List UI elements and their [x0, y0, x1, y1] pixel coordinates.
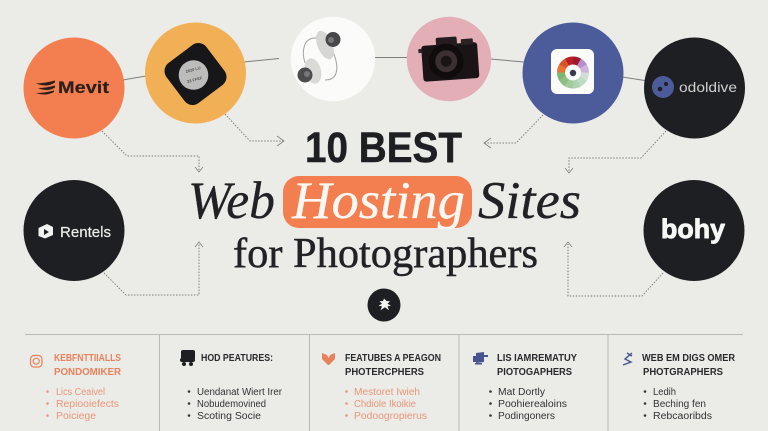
dotted arrow: device to title: [225, 114, 284, 146]
panel: column 3: [322, 352, 441, 422]
panel: column 5: [623, 352, 735, 422]
bullet list: Scoting Socie: [197, 411, 261, 422]
connector lines between top circles: [123, 58, 645, 80]
circle: Rentels logo: [24, 180, 124, 281]
icon: blue monitor: [473, 352, 488, 364]
bullet list: Lics Ceaivel: [56, 387, 105, 398]
circle: colour wheel app on blue: [522, 22, 624, 124]
heading: LIS IAMREMATUY: [497, 352, 577, 364]
circle: black device on amber: 23 FFEF: [186, 75, 203, 84]
bullet list: Poohierealoins: [498, 399, 567, 410]
title: [188, 124, 581, 277]
panel: column 4: [473, 352, 577, 422]
heading: [497, 352, 577, 378]
circle: camera on pink: [407, 17, 491, 101]
dotted arrow: Mevit to title: [102, 131, 203, 172]
icon: blue squiggle: [623, 353, 632, 365]
dotted arrow: palette to title: [484, 115, 543, 148]
dotted arrow: bohy to title: [564, 242, 663, 296]
title word: Web: Web: [188, 172, 275, 230]
circle: Mevit logo: [24, 38, 124, 138]
bullet list: Mestoret Iwieh: [354, 387, 420, 398]
icon: black device: [180, 350, 195, 366]
panel: column 1: [30, 352, 121, 422]
heading: [642, 352, 735, 378]
bullet list: Rebcaoribds: [653, 411, 712, 422]
bullet list: Beching fen: [653, 399, 706, 410]
bullet list: Poiciege: [56, 411, 96, 422]
icon: camera outline: [30, 356, 42, 367]
dotted arrow: Rentels to title: [104, 242, 203, 295]
bullet list: Podingoners: [498, 411, 555, 422]
title word: Sites: Sites: [478, 172, 581, 230]
circle: bohy logo: [644, 180, 744, 281]
heading: HOD PEATURES:: [201, 352, 273, 364]
bullet list: Chdiole Ikoikie: [354, 399, 416, 410]
bullet list: Repiooiefects: [56, 399, 119, 410]
bullet list: [489, 387, 567, 422]
heading: [54, 352, 121, 378]
footer dividers: [25, 334, 743, 431]
badge icon: [368, 288, 400, 322]
heading: PIOTOGAPHERS: [497, 366, 572, 378]
heading: KEBFNTTIIALLS: [54, 352, 121, 364]
dotted arrow: odoldive to title: [565, 131, 666, 173]
bullet list: [644, 387, 712, 422]
bullet list: Podoogropierus: [354, 411, 427, 422]
bullet list: [345, 387, 427, 422]
bullet list: Nobudemovined: [197, 399, 266, 410]
title line: 10 BEST: 10 BEST: [305, 124, 462, 172]
heading: PONDOMIKER: [54, 366, 121, 378]
circle: odoldive logo: [644, 38, 745, 138]
heading: FEATUBES A PEAGON: [345, 352, 441, 364]
circle: Rentels logo: Rentels: [60, 224, 111, 241]
circle: white earbuds: [291, 17, 375, 101]
heading: WEB EM DIGS OMER: [642, 352, 735, 364]
circle: odoldive logo: odoldive: [679, 79, 737, 95]
panel: column 2: [180, 350, 283, 422]
heading: PHOTGRAPHERS: [643, 366, 723, 378]
bullet list: Ledih: [653, 387, 676, 398]
icon: orange heart: [322, 353, 335, 365]
highlight pill: Hosting: Hosting: [291, 172, 465, 230]
bullet list: Uendanat Wiert Irer: [197, 387, 283, 398]
circle: black device on amber: 2020 LU: [185, 65, 201, 74]
circle: Mevit logo: Mevit: [58, 79, 110, 97]
bullet list: Mat Dortly: [498, 387, 545, 398]
title line: for Photographers: for Photographers: [233, 231, 538, 277]
bullet list: [46, 387, 119, 422]
circle: black device on amber: [145, 22, 246, 124]
circle: bohy logo: bohy: [661, 214, 725, 244]
heading: [345, 352, 441, 378]
heading: PHOTERCPHERS: [345, 366, 424, 378]
bullet list: [188, 387, 283, 422]
